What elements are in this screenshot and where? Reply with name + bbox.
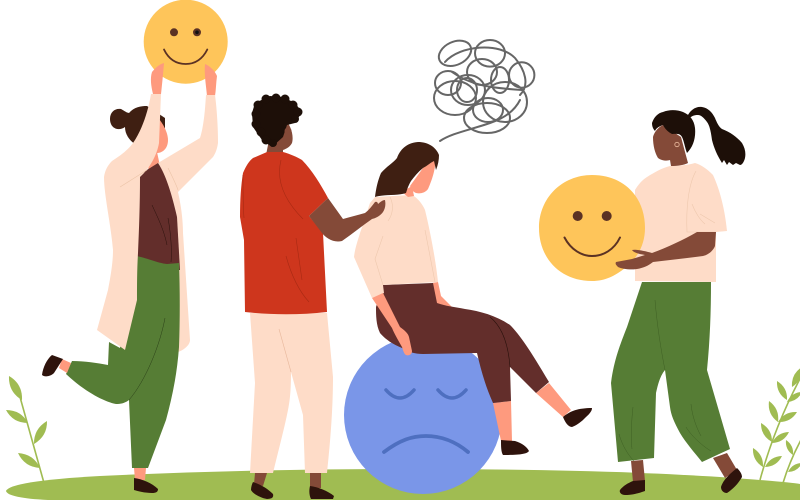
trousers bbox=[611, 282, 730, 462]
coat back panel and right sleeve bbox=[158, 95, 218, 352]
shoes bbox=[251, 482, 334, 499]
man's arm resting on the woman's shoulder bbox=[309, 198, 385, 241]
ankles bbox=[254, 473, 321, 488]
earring bbox=[675, 142, 679, 147]
ground bbox=[6, 469, 800, 500]
hair bbox=[375, 142, 439, 197]
person: woman holding smiley bbox=[539, 107, 745, 495]
blouse folds bbox=[375, 197, 435, 285]
neck and face bbox=[266, 120, 293, 156]
neck and face bbox=[653, 125, 688, 166]
far arm bbox=[241, 217, 247, 240]
shoes bbox=[620, 468, 742, 495]
trouser folds bbox=[619, 300, 711, 461]
tangled thought scribble bbox=[434, 36, 534, 141]
clothing folds bbox=[120, 168, 178, 190]
coat front and left sleeve bbox=[97, 94, 161, 350]
trousers bbox=[250, 313, 333, 473]
front leg bbox=[631, 460, 645, 482]
t-shirt bbox=[635, 163, 727, 282]
face bbox=[410, 160, 435, 193]
plant: left bbox=[6, 376, 47, 483]
trousers bbox=[66, 255, 180, 468]
blue sad ball bbox=[344, 336, 502, 494]
face bbox=[153, 118, 168, 153]
shirt folds bbox=[243, 160, 309, 302]
person: woman sitting on ball bbox=[354, 142, 592, 455]
neck bbox=[148, 150, 160, 170]
ponytail bbox=[687, 107, 745, 165]
trouser fold bbox=[490, 317, 510, 367]
plant: right bbox=[753, 367, 800, 483]
red t-shirt bbox=[240, 152, 328, 314]
frown bbox=[384, 436, 468, 452]
curly hair bbox=[252, 94, 302, 147]
lower legs bbox=[493, 383, 571, 441]
back leg bbox=[713, 453, 737, 478]
big smiley bbox=[539, 175, 645, 281]
hair bbox=[652, 110, 695, 153]
ear bbox=[284, 128, 292, 134]
right hand bbox=[432, 282, 453, 308]
person: woman in coat with raised arms bbox=[42, 63, 218, 493]
ankles bbox=[59, 359, 146, 480]
closed eyes bbox=[386, 390, 466, 398]
left arm bbox=[372, 293, 412, 355]
shoes bbox=[42, 355, 158, 493]
top bbox=[134, 163, 180, 270]
blouse bbox=[354, 195, 438, 298]
trousers bbox=[376, 283, 549, 403]
neck bbox=[402, 186, 414, 197]
hands bbox=[151, 63, 164, 94]
smiley: held overhead bbox=[144, 0, 228, 84]
sleeve fold bbox=[687, 171, 716, 232]
shoes bbox=[501, 408, 592, 455]
person: man in red shirt bbox=[240, 94, 334, 499]
hair and bun bbox=[110, 106, 165, 147]
arm and hand bbox=[616, 232, 716, 269]
